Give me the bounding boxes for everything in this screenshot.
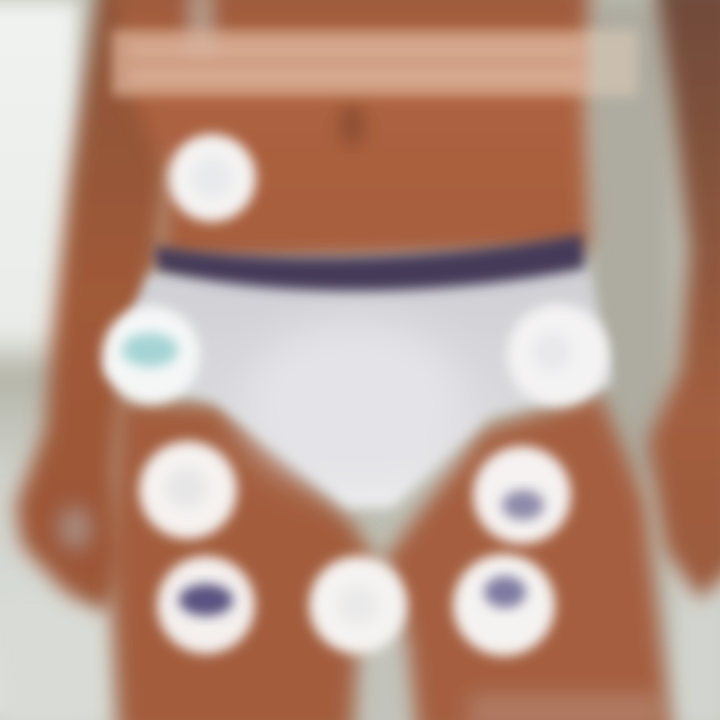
left arm and hand: [16, 0, 190, 612]
callout icon: right thigh lower: [453, 554, 555, 656]
callout icon: right thigh upper: [473, 446, 571, 544]
translucent title band: [112, 30, 637, 96]
underwear: [105, 262, 612, 508]
thighs: [110, 395, 672, 720]
callout icon: left thigh lower: [157, 556, 255, 654]
callout icon: center: [309, 556, 407, 654]
callout icon: left hip teal: [102, 306, 200, 404]
torso: [112, 0, 590, 262]
callout icon: left thigh upper: [139, 441, 237, 539]
right arm and hand: [648, 0, 720, 600]
waistband: [155, 234, 585, 291]
callout icon: right hip: [507, 304, 609, 406]
callout icon: upper abdomen: [168, 134, 256, 222]
